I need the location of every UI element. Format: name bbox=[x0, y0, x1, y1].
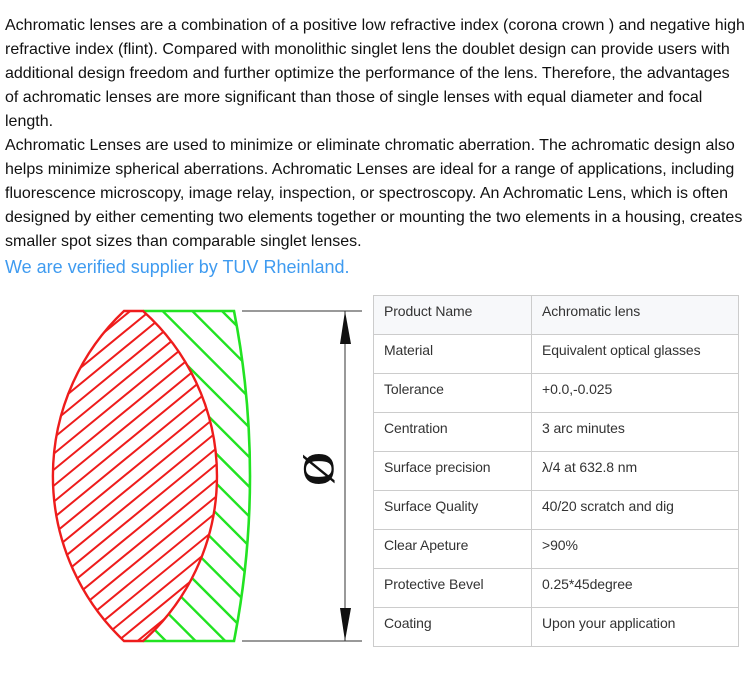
text block: achromatic lens intro: length. bbox=[5, 113, 53, 130]
diameter dimension lines and arrows bbox=[242, 311, 362, 641]
specification table: Surface Quality bbox=[384, 498, 478, 514]
text block: achromatic lens applications: Achromatic Lenses are used to minimize or eliminate chromatic aberration. The achromatic design also bbox=[5, 137, 735, 154]
text block: achromatic lens intro bbox=[5, 17, 745, 130]
specification table: Protective Bevel bbox=[384, 576, 484, 592]
diameter symbol: Ø bbox=[294, 452, 344, 486]
specification table: Achromatic lens bbox=[542, 303, 640, 319]
specification table: λ/4 at 632.8 nm bbox=[542, 459, 637, 475]
text block: achromatic lens applications: designed by either cementing two elements together or mounting the two elements in a housing, creates bbox=[5, 209, 742, 226]
specification table: 0.25*45degree bbox=[542, 576, 633, 592]
text block: achromatic lens intro: Achromatic lenses are a combination of a positive low refractive index (corona crown ) and negative high bbox=[5, 17, 745, 34]
specification table: Centration bbox=[384, 420, 448, 436]
specification table: Tolerance bbox=[384, 381, 444, 397]
text block: achromatic lens intro: additional design freedom and further optimize the performance of the lens. Therefore, the advantages bbox=[5, 65, 730, 82]
specification table: Upon your application bbox=[542, 615, 675, 631]
text block: achromatic lens intro: refractive index (flint). Compared with monolithic singlet lens the doublet design can provide users with bbox=[5, 41, 730, 58]
text block: achromatic lens applications: smaller spot sizes than comparable singlet lenses. bbox=[5, 233, 362, 250]
text block: achromatic lens intro: of achromatic lenses are more significant than those of single lenses with equal diameter and focal bbox=[5, 89, 702, 106]
specification table: +0.0,-0.025 bbox=[542, 381, 612, 397]
specification table: >90% bbox=[542, 537, 578, 553]
specification table: 3 arc minutes bbox=[542, 420, 625, 436]
text block: achromatic lens applications: fluorescence microscopy, image relay, inspection, or spectroscopy. An Achromatic Lens, which is often bbox=[5, 185, 728, 202]
specification table: Coating bbox=[384, 615, 432, 631]
specification table: 40/20 scratch and dig bbox=[542, 498, 674, 514]
lens diagram bbox=[52, 310, 362, 642]
specification table: Equivalent optical glasses bbox=[542, 342, 700, 358]
text block: achromatic lens applications: helps minimize spherical aberrations. Achromatic Lenses are ideal for a range of applications, including bbox=[5, 161, 734, 178]
specification table: Surface precision bbox=[384, 459, 490, 475]
specification table: Product Name bbox=[384, 303, 472, 319]
red crown element bbox=[52, 310, 218, 642]
specification table: Material bbox=[384, 342, 433, 358]
supplier verification note: We are verified supplier by TUV Rheinland. bbox=[5, 257, 350, 277]
specification table: Clear Apeture bbox=[384, 537, 468, 553]
green flint element bbox=[143, 310, 252, 642]
text block: achromatic lens applications bbox=[5, 137, 742, 250]
specification table bbox=[373, 295, 739, 647]
